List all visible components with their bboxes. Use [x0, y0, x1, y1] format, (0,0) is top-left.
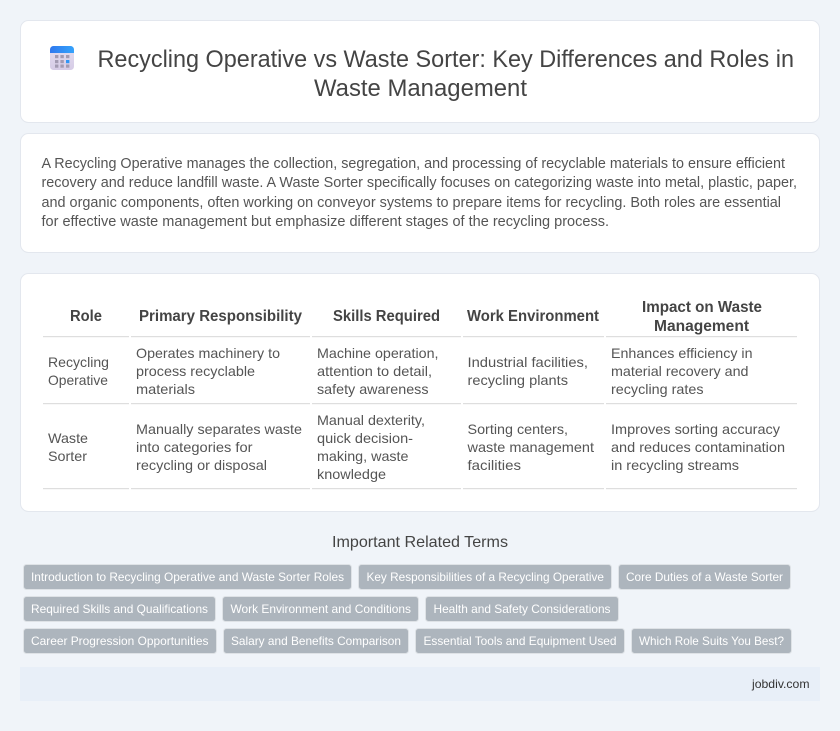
table row: Waste Sorter: Waste — [48, 430, 88, 446]
related terms tags — [24, 564, 792, 654]
table header row: Role — [70, 308, 102, 325]
table row: Recycling Operative: attention to detail, — [317, 363, 432, 379]
text block: introduction paragraph — [42, 156, 797, 230]
table row: Waste Sorter: Improves sorting accuracy — [611, 421, 780, 437]
related terms tags: Core Duties of a Waste Sorter — [626, 570, 783, 584]
table row: Waste Sorter: Manually separates waste — [136, 421, 302, 437]
table row: Recycling Operative: process recyclable — [136, 363, 255, 379]
table row: Recycling Operative: safety awareness — [317, 381, 428, 397]
table row: Recycling Operative: Industrial facilities, — [468, 354, 588, 370]
table row: Waste Sorter: making, waste — [317, 448, 409, 464]
table row: Waste Sorter: into categories for — [136, 439, 253, 455]
table row: Recycling Operative: Recycling — [48, 354, 109, 370]
related terms tags: Which Role Suits You Best? — [639, 634, 784, 648]
title: Waste Management — [314, 75, 527, 102]
related terms tags: Key Responsibilities of a Recycling Operative — [366, 570, 604, 584]
table header row: Primary Responsibility — [139, 308, 302, 325]
panel: header — [20, 20, 820, 122]
table row: Waste Sorter: quick decision- — [317, 430, 413, 446]
table row: Recycling Operative: Operates machinery to — [136, 345, 280, 361]
table header row: Impact on Waste — [642, 299, 762, 316]
related terms tags: Salary and Benefits Comparison — [231, 634, 401, 648]
table row: Waste Sorter: waste management — [466, 439, 594, 455]
table row: Waste Sorter — [48, 412, 785, 482]
related terms tags: Career Progression Opportunities — [31, 634, 208, 648]
table header row: Work Environment — [467, 308, 599, 325]
table row: Waste Sorter: in recycling streams — [611, 457, 739, 473]
panel: comparison table — [20, 274, 820, 512]
related terms tags: Work Environment and Conditions — [230, 602, 411, 616]
table row: Recycling Operative: recycling plants — [468, 372, 568, 388]
table row: Waste Sorter: and reduces contamination — [611, 439, 785, 455]
text block: introduction paragraph: for effective waste management but emphasize different stages of the recycling process. — [42, 214, 609, 230]
table row: Recycling Operative: Enhances efficiency in — [611, 345, 752, 361]
table header row — [70, 299, 762, 335]
table header row: Skills Required — [333, 308, 440, 325]
icon: calendar grid — [50, 46, 74, 70]
title: Recycling Operative vs Waste Sorter: Key Differences and Roles in — [98, 46, 794, 73]
heading: important related terms: Important Related Terms — [332, 534, 508, 551]
table row: Waste Sorter: facilities — [468, 457, 521, 473]
table row: Recycling Operative: recycling rates — [611, 381, 704, 397]
footer — [20, 667, 820, 701]
related terms tags: Essential Tools and Equipment Used — [424, 634, 616, 648]
table row: Recycling Operative: materials — [136, 381, 195, 397]
panel: introduction — [20, 134, 820, 252]
table row: Waste Sorter: knowledge — [317, 466, 386, 482]
table row: Recycling Operative: Operative — [48, 372, 108, 388]
table header row: Management — [654, 318, 749, 335]
title — [98, 46, 794, 102]
table row: Waste Sorter: Manual dexterity, — [317, 412, 425, 428]
table row: Waste Sorter: Sorting centers, — [468, 421, 568, 437]
text block: introduction paragraph: A Recycling Operative manages the collection, segregation, and processing of recyclable materials to ensure efficient — [42, 156, 785, 172]
text block: introduction paragraph: recovery and reduce landfill waste. A Waste Sorter specifically focuses on categorizing waste into metal, plastic, paper, — [42, 175, 797, 191]
table row: Recycling Operative: material recovery and — [611, 363, 748, 379]
related terms tags: Introduction to Recycling Operative and Waste Sorter Roles — [31, 570, 344, 584]
table row: Recycling Operative: Machine operation, — [317, 345, 438, 361]
related terms tags: Required Skills and Qualifications — [31, 602, 208, 616]
text block: introduction paragraph: and organic components, often working on conveyor systems to prepare items for recycling. Both roles are essential — [42, 195, 781, 211]
table row: Waste Sorter: recycling or disposal — [136, 457, 267, 473]
table row: Waste Sorter: Sorter — [48, 448, 87, 464]
table row: Recycling Operative — [48, 345, 752, 397]
related terms tags: Health and Safety Considerations — [434, 602, 610, 616]
footer: jobdiv.com — [751, 677, 810, 691]
